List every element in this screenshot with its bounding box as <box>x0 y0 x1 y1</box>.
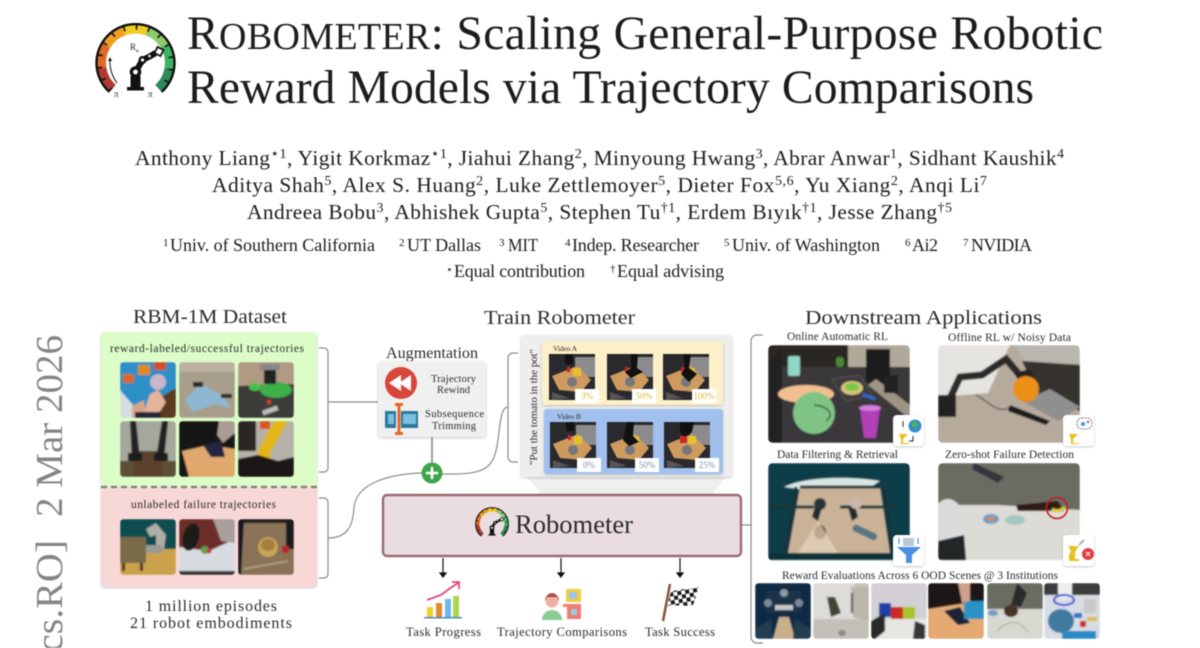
panel: augmentation <box>378 361 486 437</box>
application: reward evaluations <box>755 570 1100 639</box>
badge: world instruction <box>893 415 924 446</box>
authors: 2 <box>575 147 582 162</box>
text: subsequence trimming <box>425 409 484 432</box>
authors: 7 <box>980 174 987 189</box>
authors: Aditya Shah <box>212 173 324 197</box>
authors: ⋆1 <box>270 147 287 162</box>
authors: , Anqi Li <box>898 173 980 197</box>
panel: RBM-1M dataset <box>101 332 317 587</box>
affiliations: 7 <box>963 237 969 249</box>
badge: funnel filter <box>893 535 924 566</box>
output: trajectory comparisons: Trajectory Comparisons <box>497 625 627 639</box>
labels B: 25% <box>699 460 716 470</box>
contribution notes: Equal advising <box>617 261 724 281</box>
authors: 2 <box>476 174 483 189</box>
label: Robometer: Robometer <box>515 510 633 539</box>
application: offline RL: Offline RL w/ Noisy Data <box>948 332 1071 344</box>
labels A: 3% <box>581 391 594 401</box>
icon: rewind <box>385 367 417 399</box>
authors: , Stephen Tu <box>548 200 661 224</box>
text: task instruction: "Put the tomato in the pot" <box>528 349 540 465</box>
panel: successful trajectories <box>101 332 317 487</box>
application: data filtering <box>768 449 924 566</box>
authors: , Sidhant Kaushik <box>897 146 1057 170</box>
photo: overhead table <box>768 463 910 560</box>
authors: ⋆1 <box>431 147 447 162</box>
icon: Robometer gauge logo: π <box>114 89 119 99</box>
affiliations: Univ. of Washington <box>732 235 880 255</box>
authors: 5 <box>658 174 665 189</box>
text: trajectory rewind: Rewind <box>437 385 471 396</box>
photo: bimanual grippers <box>120 421 176 477</box>
authors: , Dieter Fox <box>666 173 775 197</box>
text: subsequence trimming: Trimming <box>432 421 477 432</box>
labels A: 50% <box>636 391 653 401</box>
icon: film trimming <box>385 403 418 435</box>
text: dataset stats <box>130 598 292 632</box>
contribution notes: † <box>610 263 616 275</box>
authors: 4 <box>1057 147 1064 162</box>
photo: folding cloth <box>179 421 235 477</box>
authors: Anthony Liang <box>135 146 270 170</box>
labels B <box>577 458 719 472</box>
heading: RBM-1M Dataset: RBM-1M Dataset <box>133 306 287 328</box>
affiliations: MIT <box>508 235 538 255</box>
panel: video B: Video B <box>557 412 581 421</box>
output: trajectory comparisons <box>497 589 627 639</box>
panel: Robometer model <box>383 495 741 556</box>
labels B: 50% <box>639 460 656 470</box>
text: trajectory rewind: Trajectory <box>431 374 477 385</box>
contribution notes <box>446 261 724 281</box>
arXiv side stamp: 2 Mar 2026 <box>29 335 71 517</box>
icon: Robometer gauge logo: R <box>130 42 136 52</box>
photo: cloth on floor <box>179 362 235 418</box>
authors: 2 <box>891 174 898 189</box>
application: online automatic RL <box>768 331 924 446</box>
icon: plus combine <box>422 462 442 484</box>
frame A1 <box>549 354 595 400</box>
authors: , Jiahui Zhang <box>447 146 575 170</box>
labels A <box>575 389 716 403</box>
authors: 5 <box>540 201 547 216</box>
connector: dataset brackets to augmentation and plus <box>319 348 752 578</box>
application: offline RL <box>938 332 1094 446</box>
panel: training comparison <box>521 335 732 495</box>
icon: Robometer gauge logo: π <box>148 89 153 99</box>
affiliations: UT Dallas <box>407 235 481 255</box>
callout: failure circle <box>1046 498 1068 518</box>
photo: scene 3 <box>871 583 927 639</box>
output: task success <box>645 584 715 639</box>
affiliations: 1 <box>163 237 168 249</box>
authors: , Luke Zettlemoyer <box>484 173 658 197</box>
affiliations: 3 <box>499 237 505 249</box>
photo: scene 4 <box>928 583 984 639</box>
application: reward evaluations: Reward Evaluations Across 6 OOD Scenes @ 3 Institutions <box>782 570 1059 582</box>
authors: †1 <box>661 201 675 216</box>
photo: object on white table <box>179 519 235 575</box>
text: subsequence trimming: Subsequence <box>425 409 484 420</box>
authors: , Alex S. Huang <box>332 173 476 197</box>
arrows: model outputs <box>440 558 683 577</box>
icon: Robometer gauge logo <box>96 24 174 99</box>
authors: , Yu Xiang <box>794 173 891 197</box>
photo: bowl on wood <box>238 519 294 575</box>
frame B1 <box>550 422 596 468</box>
title: Reward Models via Trajectory Comparisons <box>187 62 1034 114</box>
heading: Train Robometer: Train Robometer <box>484 307 635 329</box>
title: ROBOMETER: Scaling General-Purpose Robotic <box>187 8 1103 60</box>
diagram <box>101 306 1100 643</box>
authors: †5 <box>938 201 952 216</box>
badge: robot failure <box>1063 535 1094 566</box>
arXiv side stamp <box>29 335 71 648</box>
panel: video A: Video A <box>553 344 578 353</box>
output: task progress: Task Progress <box>406 625 481 639</box>
authors: 3 <box>377 201 384 216</box>
text: dataset stats: 1 million episodes <box>145 598 277 615</box>
photo: arm and orange <box>938 345 1080 443</box>
icon: Robometer gauge logo: φ <box>136 49 139 54</box>
photo: table scene with banana <box>931 463 1080 560</box>
authors <box>135 146 1064 224</box>
icon: person comparing <box>542 589 581 620</box>
authors: , Abrar Anwar <box>763 146 890 170</box>
authors: 3 <box>756 147 763 162</box>
affiliations: Indep. Researcher <box>572 235 699 255</box>
affiliations: 6 <box>905 237 911 249</box>
heading: Downstream Applications: Downstream Applications <box>805 307 1042 329</box>
frame A3 <box>663 354 709 400</box>
output: task success: Task Success <box>645 625 715 639</box>
authors: , Yigit Korkmaz <box>287 146 430 170</box>
application: failure detection <box>931 449 1094 566</box>
frame A2 <box>607 354 653 400</box>
affiliations <box>163 235 1032 255</box>
icon: checkered flag <box>663 584 699 621</box>
application: online automatic RL: Online Automatic RL <box>787 331 888 343</box>
photo: kitchen scene <box>768 345 910 443</box>
labels A: 100% <box>694 391 715 401</box>
photo: scene 6 <box>1044 583 1100 639</box>
photo: yellow arm <box>238 421 294 477</box>
affiliations: 5 <box>724 237 730 249</box>
icon: small gauge <box>476 508 508 536</box>
affiliations: NVIDIA <box>971 235 1032 255</box>
labels B: 0% <box>583 460 596 470</box>
authors: 5,6 <box>775 174 794 189</box>
photo: scene 2 <box>813 583 869 639</box>
authors: , Minyoung Hwang <box>582 146 755 170</box>
text: dataset stats: 21 robot embodiments <box>130 615 292 632</box>
application: data filtering: Data Filtering & Retrieval <box>777 449 898 461</box>
authors: , Jesse Zhang <box>817 200 937 224</box>
affiliations: Univ. of Southern California <box>170 235 375 255</box>
panel: successful trajectories: reward-labeled/successful trajectories <box>110 343 305 355</box>
affiliations: 2 <box>399 237 404 249</box>
authors: 1 <box>890 147 897 162</box>
contribution notes: ⋆ <box>446 264 453 276</box>
photo: hand and toys <box>120 362 176 418</box>
photo: simulated arm <box>120 519 176 575</box>
title <box>187 8 1103 114</box>
bracket: applications <box>751 335 763 643</box>
photo: robot with green disc <box>238 362 294 418</box>
authors: †1 <box>802 201 817 216</box>
frame B2 <box>607 422 653 468</box>
photo: scene 1 <box>755 583 811 639</box>
authors: 5 <box>324 174 331 189</box>
output: task progress <box>406 582 481 639</box>
authors: , Erdem Bıyık <box>676 200 802 224</box>
affiliations: 4 <box>565 237 571 249</box>
frame B3 <box>664 422 710 468</box>
badge: noisy data thought <box>1063 415 1094 446</box>
application: failure detection: Zero-shot Failure Detection <box>945 449 1074 461</box>
panel: failure trajectories <box>101 487 317 587</box>
panel: video A <box>542 341 723 405</box>
panel: failure trajectories: unlabeled failure trajectories <box>131 499 277 511</box>
panel: video B <box>544 409 723 474</box>
authors: Andreea Bobu <box>247 200 376 224</box>
contribution notes: Equal contribution <box>454 261 585 281</box>
icon: rising bar chart <box>424 582 462 618</box>
authors: , Abhishek Gupta <box>384 200 540 224</box>
text: trajectory rewind <box>431 374 477 396</box>
photo: scene 5 <box>987 583 1043 639</box>
heading: Augmentation: Augmentation <box>386 345 478 362</box>
affiliations: Ai2 <box>912 235 938 255</box>
